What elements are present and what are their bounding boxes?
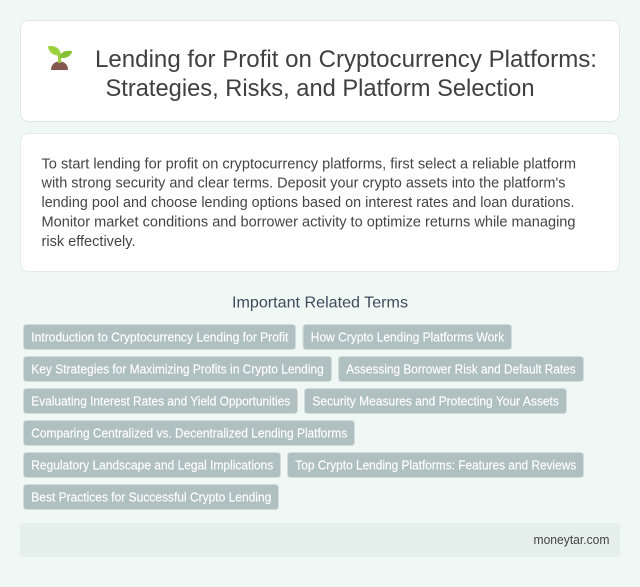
text block: lending overview: with strong security and clear terms. Deposit your crypto assets into the platform's	[41, 175, 566, 192]
tag: Regulatory Landscape and Legal Implications	[31, 458, 273, 472]
title: Lending for Profit on Cryptocurrency Platforms:	[95, 46, 597, 73]
tag: Evaluating Interest Rates and Yield Opportunities	[31, 394, 290, 408]
footer	[20, 523, 620, 557]
tag: Introduction to Cryptocurrency Lending for Profit	[31, 330, 289, 344]
panel: header	[20, 20, 620, 122]
panel: related terms tags	[24, 324, 584, 510]
tag	[338, 356, 584, 382]
tag: Best Practices for Successful Crypto Lending	[31, 490, 271, 504]
text block: lending overview: To start lending for profit on cryptocurrency platforms, first select a reliable platform	[42, 155, 576, 172]
tag	[24, 452, 280, 478]
tag	[24, 420, 354, 446]
tag	[24, 356, 332, 382]
tag: Comparing Centralized vs. Decentralized Lending Platforms	[31, 426, 347, 440]
text block: lending overview: lending pool and choose lending options based on interest rates and loan durations.	[42, 194, 574, 211]
text block: lending overview: Monitor market conditions and borrower activity to optimize returns while managing	[42, 214, 576, 231]
tag	[288, 452, 584, 478]
tag	[24, 484, 278, 510]
tag	[24, 324, 296, 350]
tag	[303, 324, 512, 350]
heading: important related terms: Important Related Terms	[232, 294, 408, 311]
icon: sprout	[48, 46, 72, 70]
tag: Top Crypto Lending Platforms: Features and Reviews	[295, 458, 576, 472]
tag: Assessing Borrower Risk and Default Rates	[346, 362, 576, 376]
tag: Key Strategies for Maximizing Profits in Crypto Lending	[31, 362, 324, 376]
tag	[24, 388, 298, 414]
text block: lending overview	[41, 155, 576, 250]
footer source text: moneytar.com	[534, 533, 610, 547]
title: Strategies, Risks, and Platform Selection	[106, 75, 534, 102]
text block: lending overview: risk effectively.	[42, 233, 136, 250]
panel: introduction text	[20, 134, 620, 272]
tag: How Crypto Lending Platforms Work	[311, 330, 505, 344]
tag: Security Measures and Protecting Your Assets	[312, 394, 559, 408]
tag	[304, 388, 566, 414]
title	[95, 46, 597, 102]
